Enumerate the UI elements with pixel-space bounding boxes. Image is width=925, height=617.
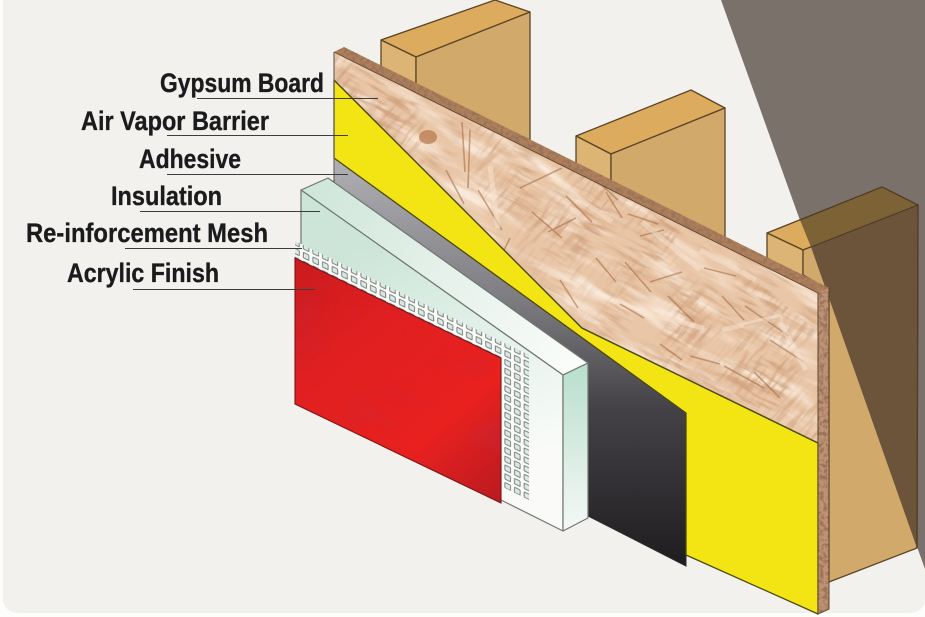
label: Insulation: Insulation	[111, 181, 222, 211]
label: Re-inforcement Mesh: Re-inforcement Mesh	[26, 218, 268, 248]
stud: left	[381, 0, 530, 140]
layer: reinforcement mesh	[295, 241, 529, 500]
layer: adhesive	[334, 158, 686, 566]
board left edge line	[333, 52, 335, 180]
knot in board	[419, 130, 437, 144]
stud: middle	[576, 90, 725, 238]
insulation side face	[563, 363, 588, 531]
label: Gypsum Board: Gypsum Board	[160, 68, 324, 98]
label: Air Vapor Barrier: Air Vapor Barrier	[81, 106, 269, 136]
label: Acrylic Finish: Acrylic Finish	[67, 258, 219, 288]
label: Adhesive: Adhesive	[139, 144, 241, 174]
wood strand shards	[446, 122, 804, 398]
layer: gypsum board face	[334, 52, 818, 444]
layer: air vapor barrier	[334, 80, 818, 614]
stud shadow: top	[800, 187, 918, 247]
insulation front face	[301, 190, 563, 531]
board right edge	[818, 288, 830, 615]
stud shadow: face	[811, 205, 918, 548]
board top edge	[330, 40, 835, 300]
layer: insulation	[301, 178, 588, 531]
stud: right, partly in shadow	[767, 187, 918, 582]
insulation top face	[301, 178, 588, 375]
layer: acrylic finish	[290, 250, 505, 510]
cast shadow	[721, 0, 925, 569]
